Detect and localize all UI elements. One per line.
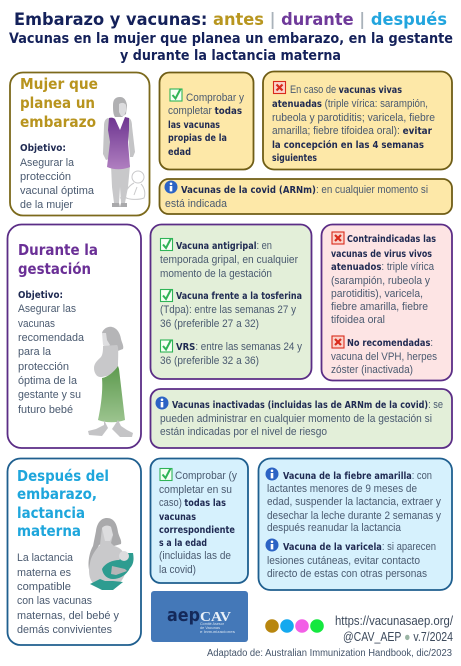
box: vacunas vivas atenuadas (263, 72, 452, 170)
text: pueden administrar en cualquier momento de la gestación si (160, 413, 432, 425)
objective text: vacunas (18, 318, 55, 330)
text: completar en su (159, 484, 232, 496)
website and version (335, 614, 453, 644)
source note: Adaptado de: Australian Immunization Handbook, dic/2023 (207, 648, 452, 659)
text: la concepción en las 4 semanas (272, 139, 424, 151)
illustration: pregnant woman in green skirt (88, 327, 133, 437)
logo: aep CAV: Comité Asesor (200, 622, 225, 626)
heading: durante la gestacion: Durante la (18, 241, 98, 259)
text: Vacunas de la covid (ARNm): en cualquier momento si (181, 184, 428, 196)
contraindicadas text: parotiditis), varicela, (331, 288, 423, 300)
body text: maternas, del bebé y (17, 610, 119, 622)
icon: check (160, 340, 172, 352)
panel: despues del embarazo (8, 458, 141, 645)
heading: despues del embarazo: embarazo, (17, 485, 97, 503)
text: las vacunas (168, 120, 220, 131)
no recomendadas text: vacuna del VPH, herpes (331, 351, 437, 363)
heading: despues del embarazo: lactancia (17, 504, 85, 522)
varicela text: lesiones cutáneas, evitar contacto (267, 555, 420, 567)
panel: durante la gestacion (8, 224, 141, 448)
box: covid (160, 179, 452, 214)
tosferina text: Vacuna frente a la tosferina (176, 291, 302, 302)
heading: despues del embarazo: materna (17, 522, 81, 540)
fiebre amarilla text: Vacuna de la fiebre amarilla: con (283, 470, 432, 482)
icon: info (266, 468, 278, 480)
tosferina text: (Tdpa): entre las semanas 27 y (160, 304, 296, 316)
text (272, 84, 435, 164)
text (168, 92, 244, 158)
objective text: protección (20, 171, 71, 183)
antigripal text: temporada gripal, en cualquier (160, 254, 298, 266)
objective text: Objetivo: (18, 290, 63, 301)
fiebre amarilla text (267, 470, 441, 534)
no recomendadas text (331, 337, 437, 376)
logo: aep CAV: e Inmunizaciones (200, 630, 235, 634)
objective text: Asegurar las (18, 303, 76, 315)
objective text: protección (18, 361, 69, 373)
text: siguientes (272, 153, 317, 164)
objective text: recomendada (18, 332, 85, 344)
text: vacunas (159, 512, 196, 523)
objective text: Asegurar la (20, 157, 75, 169)
objective text: vacunal óptima (20, 185, 95, 197)
tosferina text (160, 291, 302, 330)
objective text: de la mujer (20, 199, 73, 211)
text: propias de la (168, 133, 227, 144)
text: está indicada (165, 198, 228, 210)
no recomendadas text: No recomendadas: (347, 337, 433, 349)
objective text: gestante y su (18, 389, 81, 401)
heading: durante la gestacion (18, 241, 98, 278)
icon: check (160, 238, 172, 250)
logo: aep CAV: aep (167, 605, 200, 626)
heading: mujer que planea un embarazo: planea un (20, 94, 95, 112)
body text: con las vacunas (17, 595, 92, 607)
heading: despues del embarazo: Después del (17, 467, 109, 485)
varicela text: Vacuna de la varicela: si aparecen (283, 541, 436, 553)
box: comprobar vacunas postparto (150, 458, 248, 583)
title (9, 10, 453, 64)
text: En caso de vacunas vivas (290, 84, 402, 96)
icon: info (266, 538, 278, 552)
title: Embarazo y vacunas: antes | durante | después (14, 10, 447, 30)
heading: mujer que planea un embarazo: embarazo (20, 113, 96, 131)
logo: aep CAV: CAV (200, 610, 231, 625)
text (160, 399, 443, 438)
panel: mujer que planea un embarazo (10, 72, 150, 216)
heading: mujer que planea un embarazo: Mujer que (20, 75, 98, 93)
body text: demás convivientes (17, 624, 112, 636)
varicela text: directo de estas con otras personas (267, 568, 427, 580)
icon: check (160, 290, 172, 302)
text (165, 184, 428, 210)
no recomendadas text: zóster (inactivada) (331, 364, 413, 376)
logo: aep CAV (151, 591, 248, 642)
box: fiebre amarilla y varicela (258, 458, 452, 590)
icon: info (156, 396, 168, 410)
icon: check (170, 89, 182, 101)
text: están indicadas por el nivel de riesgo (160, 426, 327, 438)
text: s a la edad (159, 538, 207, 549)
heading: despues del embarazo (17, 467, 109, 540)
VRS text: 36 (preferible 32 a 36) (160, 355, 259, 367)
text: correspondiente (159, 525, 235, 536)
body text: compatible (17, 581, 71, 593)
website and version: @CAV_AEP ● v.7/2024 (343, 630, 453, 644)
fiebre amarilla text: después reanudar la lactancia (267, 522, 402, 534)
text: rubeola y parotiditis; varicela, fiebre (272, 112, 435, 124)
illustration: breastfeeding mother (89, 518, 134, 590)
title: y durante la lactancia materna (120, 48, 341, 64)
logo: aep CAV: de Vacunas (200, 626, 220, 630)
VRS text: VRS: entre las semanas 24 y (176, 341, 302, 353)
illustration: woman in purple dress with baby (103, 97, 145, 207)
text: Comprobar y (186, 92, 244, 104)
text: amarilla; fiebre tifoidea oral): evitar (272, 125, 432, 137)
contraindicadas text: (sarampión, rubeola y (331, 275, 430, 287)
box: contraindicadas (322, 224, 452, 380)
icon: cross (332, 232, 344, 244)
icon: check (160, 468, 172, 480)
objective text: futuro bebé (18, 404, 73, 416)
contraindicadas text: fiebre amarilla, fiebre (331, 301, 428, 313)
fiebre amarilla text: lactantes menores de 9 meses de (267, 483, 417, 495)
varicela text (267, 541, 436, 580)
fiebre amarilla text: desechar la leche durante 2 semanas y (267, 510, 441, 522)
objective text: para la (18, 346, 52, 358)
antigripal text: momento de la gestación (160, 268, 272, 280)
objective text (18, 290, 85, 416)
antigripal text (160, 240, 298, 280)
icon: info (164, 180, 178, 194)
tosferina text: 36 (preferible 27 a 32) (160, 318, 259, 330)
heading: durante la gestacion: gestación (18, 260, 91, 278)
text: Comprobar (y (175, 470, 237, 482)
text: edad (168, 147, 191, 158)
box: vacunas inactivadas (150, 389, 452, 448)
contraindicadas text: atenuados: triple vírica (331, 261, 435, 273)
box: comprobar vacunas (160, 72, 254, 170)
text: atenuadas (triple vírica: sarampión, (272, 98, 428, 110)
box: vacunas recomendadas en gestacion (150, 224, 312, 379)
contraindicadas text: Contraindicadas las (347, 234, 436, 245)
antigripal text: Vacuna antigripal: en (176, 240, 272, 252)
icon: cross (332, 336, 344, 348)
objective text: Objetivo: (20, 143, 66, 154)
VRS text (160, 341, 302, 367)
text: (incluidas las de (159, 550, 231, 562)
text: caso) todas las (159, 497, 226, 509)
text: completar todas (168, 105, 242, 117)
contraindicadas text: vacunas de virus vivos (331, 249, 432, 260)
body text: La lactancia (17, 552, 74, 564)
body text: materna es (17, 567, 71, 579)
text: la covid) (159, 564, 196, 576)
contraindicadas text: tifoidea oral (331, 314, 385, 326)
fiebre amarilla text: edad, suspender la lactancia, extraer y (267, 496, 441, 508)
legend dots (265, 619, 324, 633)
objective text: óptima de la (18, 375, 78, 387)
text (159, 470, 237, 576)
body text (17, 552, 119, 636)
contraindicadas text (331, 234, 436, 326)
objective text (20, 143, 95, 211)
heading: mujer que planea un embarazo (20, 75, 98, 131)
icon: cross (274, 82, 286, 94)
